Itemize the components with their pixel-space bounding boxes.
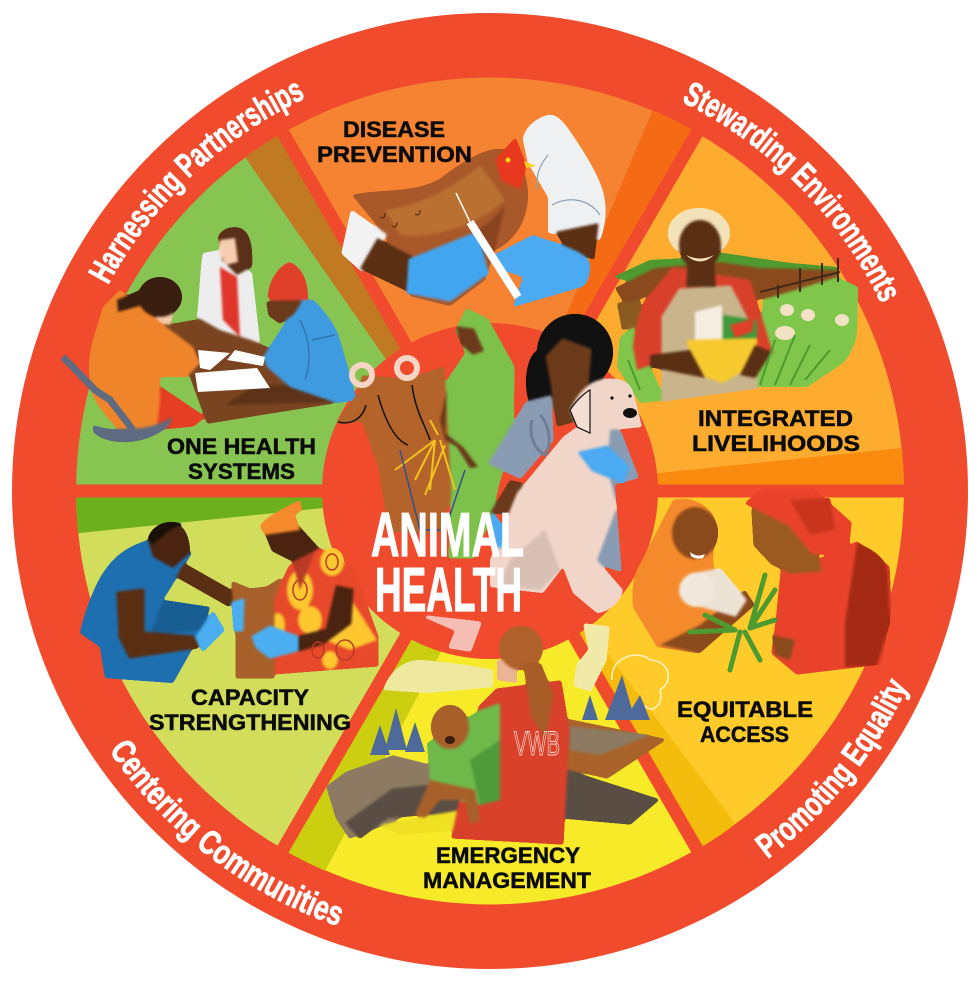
panel: one health systems illustration xyxy=(63,227,357,442)
ring text: stewarding environments: Stewarding Environments xyxy=(684,82,896,302)
ring text: promoting equality: Promoting Equality xyxy=(754,678,910,859)
ring text: harnessing partnerships: Harnessing Partnerships xyxy=(88,83,304,284)
label: disease prevention: PREVENTION xyxy=(317,142,472,167)
panel: capacity strengthening illustration xyxy=(80,500,377,683)
wedge dividers xyxy=(60,119,920,863)
wedge backgrounds xyxy=(70,78,910,904)
panel: integrated livelihoods illustration xyxy=(613,208,858,403)
label: one health systems: ONE HEALTH xyxy=(167,434,316,459)
label: equitable access: EQUITABLE xyxy=(677,697,813,722)
ring text: centering communities: Centering Communities xyxy=(112,740,342,925)
label: emergency management: MANAGEMENT xyxy=(423,868,592,893)
title: animal health: ANIMAL xyxy=(371,501,524,570)
panel: equitable access illustration xyxy=(633,490,890,673)
VWB logo text: VWB xyxy=(514,725,560,763)
label: integrated livelihoods: INTEGRATED xyxy=(698,406,853,431)
label: capacity strengthening: CAPACITY xyxy=(191,685,309,710)
label: capacity strengthening: STRENGTHENING xyxy=(149,710,351,735)
panel: central hub illustration xyxy=(338,310,642,613)
label: integrated livelihoods: LIVELIHOODS xyxy=(692,431,860,456)
panel: disease prevention illustration xyxy=(343,115,605,307)
title: animal health: HEALTH xyxy=(375,556,522,625)
central hub xyxy=(322,323,658,659)
panel: emergency management illustration xyxy=(328,617,668,843)
label: disease prevention: DISEASE xyxy=(343,117,445,142)
label: equitable access: ACCESS xyxy=(700,722,789,747)
label: one health systems: SYSTEMS xyxy=(188,459,295,484)
label: emergency management: EMERGENCY xyxy=(436,843,580,868)
